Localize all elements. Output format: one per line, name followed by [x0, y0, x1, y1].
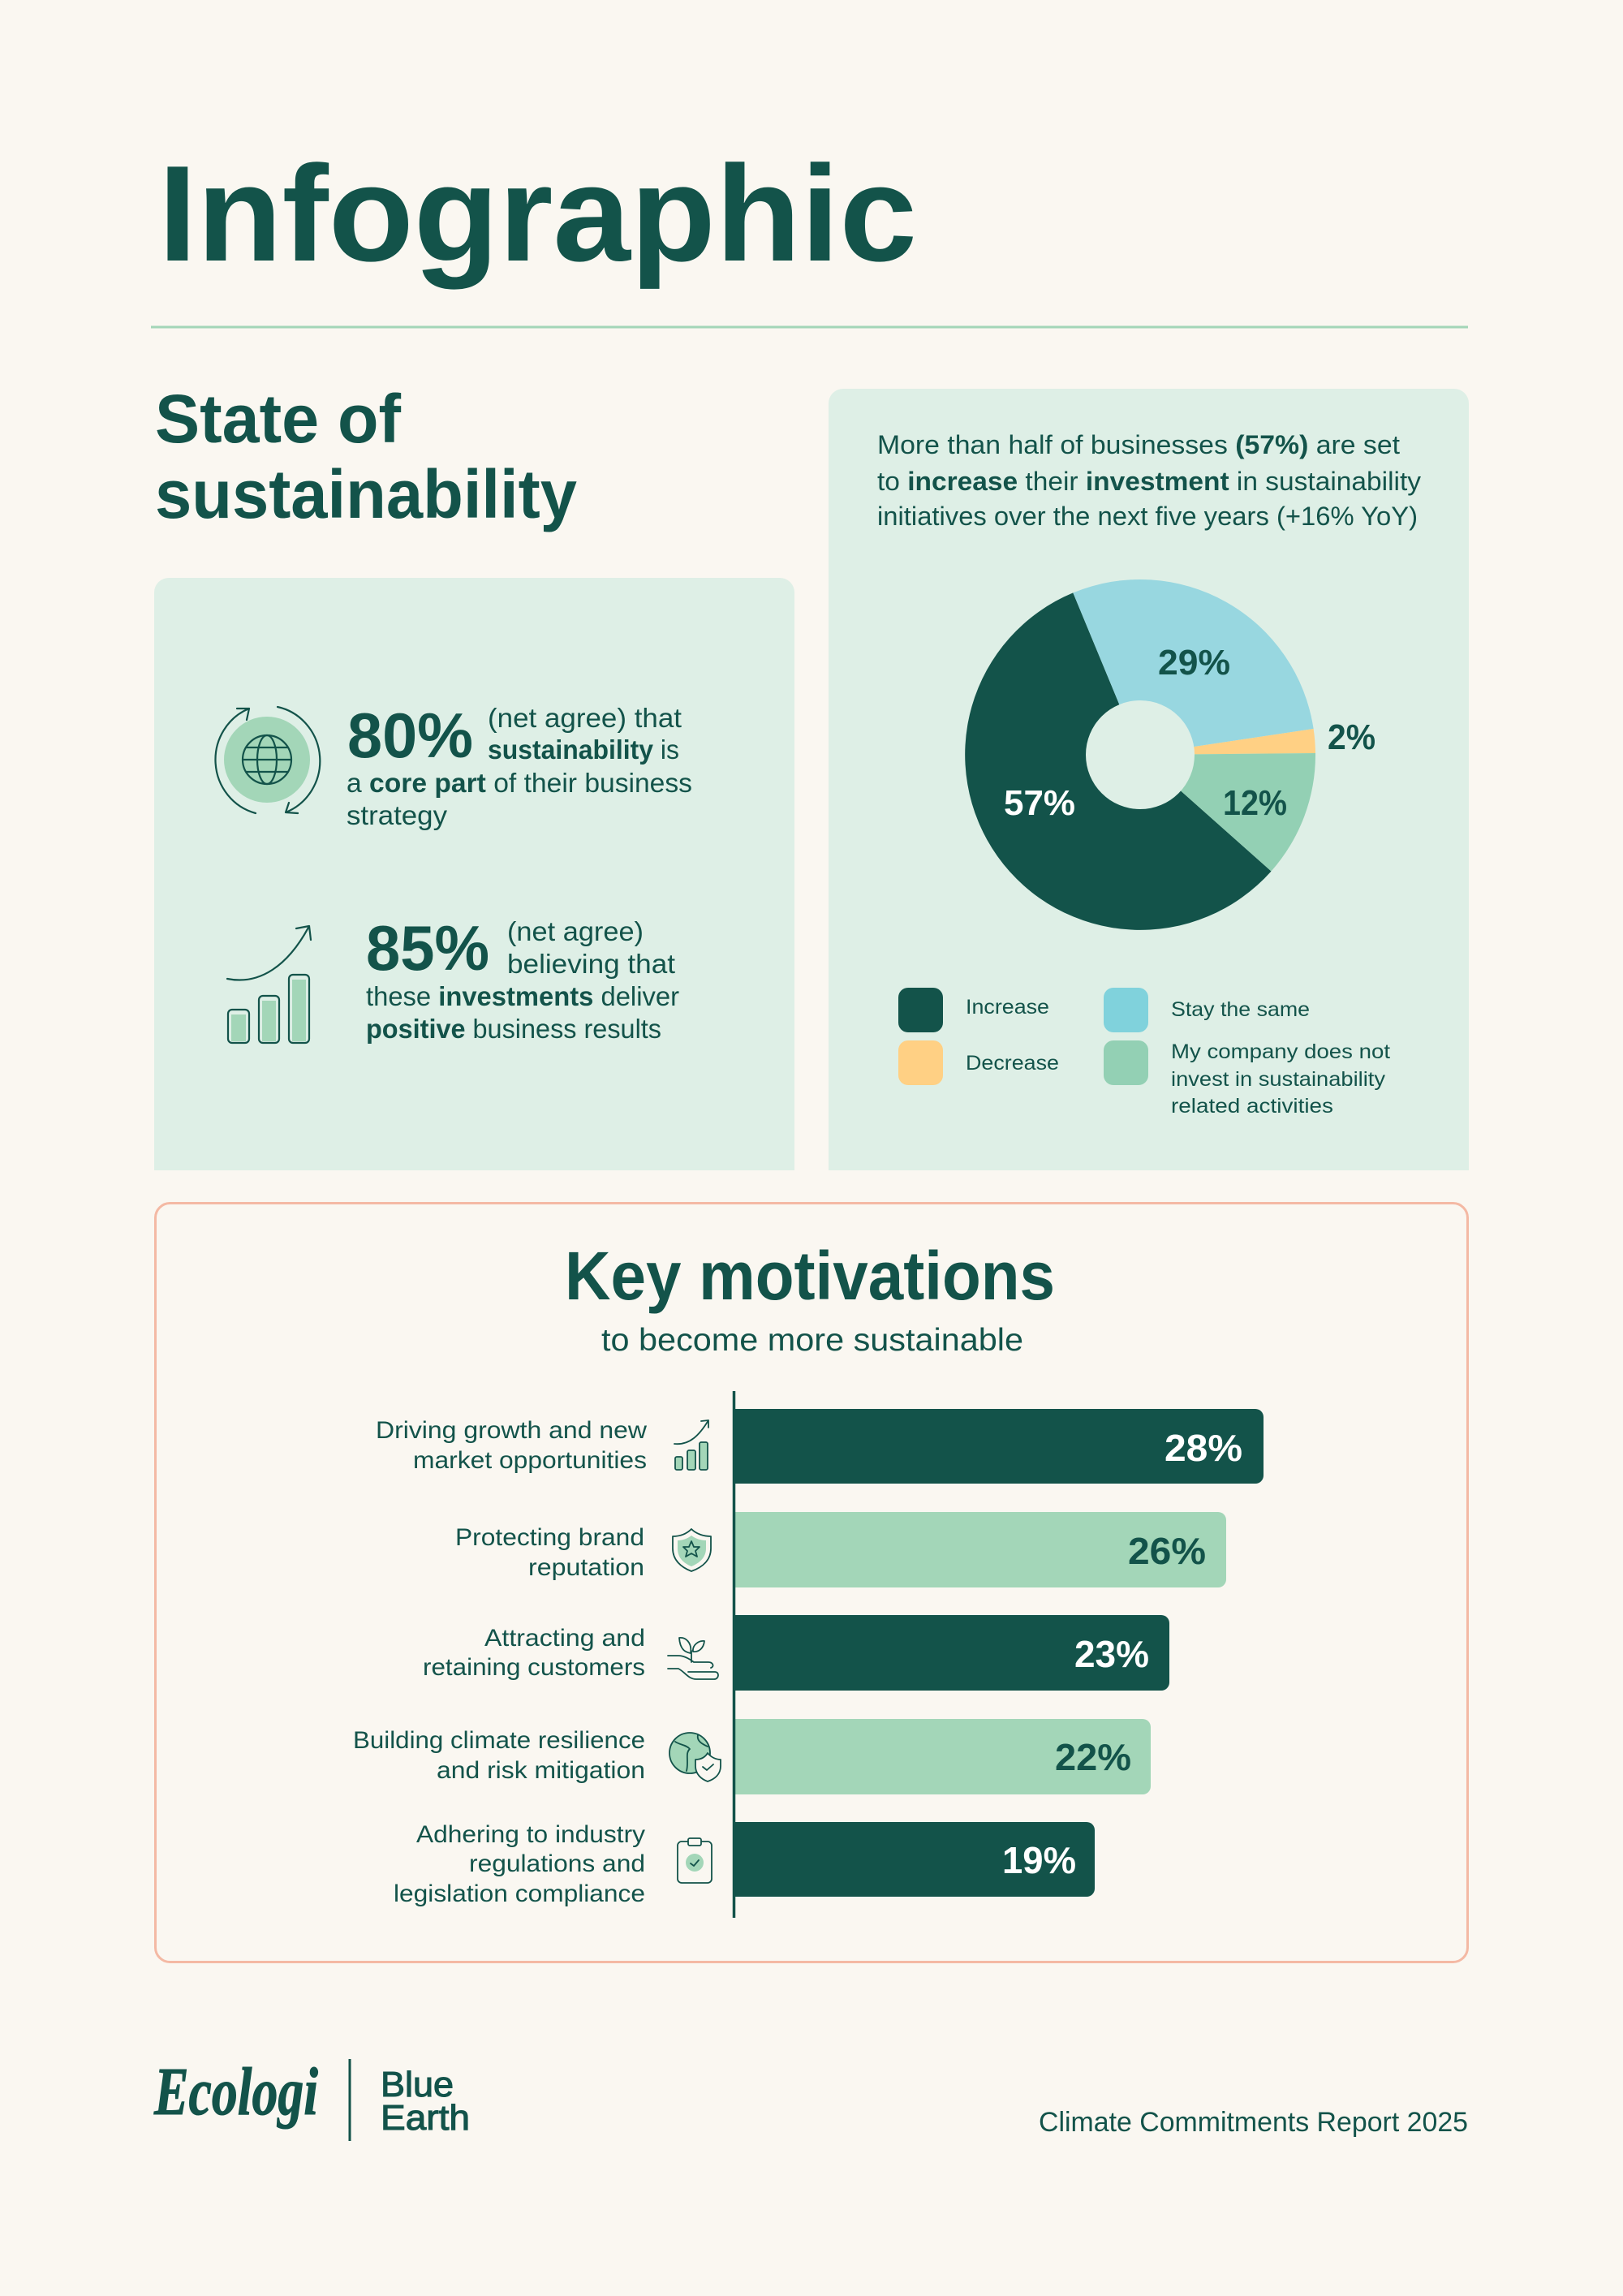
footer: report name: Climate Commitments Report 2025	[1039, 2107, 1468, 2138]
statistic: 85 percent: believing that	[507, 949, 675, 979]
motivation labels: reputation	[528, 1554, 644, 1581]
bar chart: motivations: 22%	[1055, 1736, 1131, 1778]
bar chart: motivations	[734, 1391, 1264, 1918]
motivation labels: Attracting and	[484, 1625, 645, 1652]
bar chart: motivations: 26%	[1128, 1530, 1206, 1572]
text block: investment intro: initiatives over the next five years (+16% YoY)	[877, 502, 1418, 531]
icon: rising bar chart	[227, 926, 311, 1043]
icon: hand holding plant	[668, 1638, 718, 1679]
motivation labels: and risk mitigation	[437, 1757, 645, 1784]
motivation labels: retaining customers	[423, 1654, 645, 1681]
motivation labels: Driving growth and new	[376, 1417, 647, 1444]
statistic: 80 percent: sustainability is	[488, 734, 679, 765]
donut chart: 29%	[1158, 643, 1230, 683]
statistic: 85 percent	[366, 912, 679, 1044]
legend: My company does not	[1171, 1040, 1390, 1063]
legend: Stay the same	[1171, 998, 1310, 1021]
donut chart: 57%	[1004, 783, 1075, 823]
icon: globe with shield	[669, 1733, 721, 1781]
heading: state of sustainability	[155, 381, 577, 532]
legend: Increase	[966, 996, 1049, 1019]
logo: Ecologi Blue Earth: Ecologi	[153, 2054, 318, 2130]
subheading: to become more sustainable	[601, 1323, 1023, 1358]
motivation labels: market opportunities	[413, 1447, 647, 1474]
statistic: 85 percent: 85%	[366, 912, 489, 984]
motivation labels: Adhering to industry	[416, 1821, 645, 1848]
logo: Ecologi Blue Earth: Earth	[381, 2098, 470, 2138]
legend: invest in sustainability	[1171, 1068, 1386, 1091]
statistic: 80 percent: strategy	[347, 800, 448, 830]
statistic: 85 percent: (net agree)	[507, 916, 644, 946]
motivation labels: Protecting brand	[455, 1524, 644, 1551]
icon: shield with star	[673, 1529, 711, 1571]
icon: growth chart	[674, 1420, 708, 1470]
statistic: 80 percent: 80%	[347, 700, 473, 771]
statistic: 80 percent: (net agree) that	[488, 703, 682, 733]
heading: key motivations: Key motivations	[565, 1238, 1055, 1314]
bar chart: motivations: 19%	[1002, 1839, 1076, 1881]
bar chart: motivations: 28%	[1165, 1427, 1242, 1469]
statistic: 85 percent: these investments deliver	[366, 981, 679, 1011]
statistic: 80 percent: a core part of their business	[347, 768, 692, 798]
motivation labels: Building climate resilience	[353, 1727, 645, 1754]
panel: key motivations	[156, 1203, 1467, 1962]
motivation labels	[353, 1417, 647, 1907]
motivation labels: legislation compliance	[394, 1880, 645, 1907]
text block: investment intro	[877, 430, 1421, 531]
panel: investment outlook	[829, 389, 1469, 1170]
donut chart: 2%	[1328, 717, 1375, 757]
icon: globe with cycle arrows	[215, 707, 320, 813]
legend: related activities	[1171, 1095, 1333, 1118]
statistic: 85 percent: positive business results	[366, 1014, 661, 1044]
heading: state of sustainability: State of	[155, 381, 402, 457]
legend: Decrease	[966, 1052, 1059, 1075]
title: Infographic	[158, 137, 917, 290]
panel: sustainability statistics	[154, 578, 794, 1170]
statistic: 80 percent	[347, 700, 692, 830]
motivation labels: regulations and	[469, 1850, 645, 1877]
legend	[898, 988, 1390, 1118]
logo: Ecologi Blue Earth: Blue	[381, 2065, 454, 2104]
text block: investment intro: to increase their investment in sustainability	[877, 467, 1421, 496]
text block: investment intro: More than half of businesses (57%) are set	[877, 430, 1400, 459]
donut chart: 12%	[1223, 783, 1287, 823]
bar chart: motivations: 23%	[1074, 1633, 1149, 1675]
heading: state of sustainability: sustainability	[155, 456, 577, 532]
logo: Ecologi Blue Earth	[153, 2054, 470, 2141]
icon: clipboard with check	[678, 1838, 712, 1883]
donut chart	[965, 579, 1375, 930]
